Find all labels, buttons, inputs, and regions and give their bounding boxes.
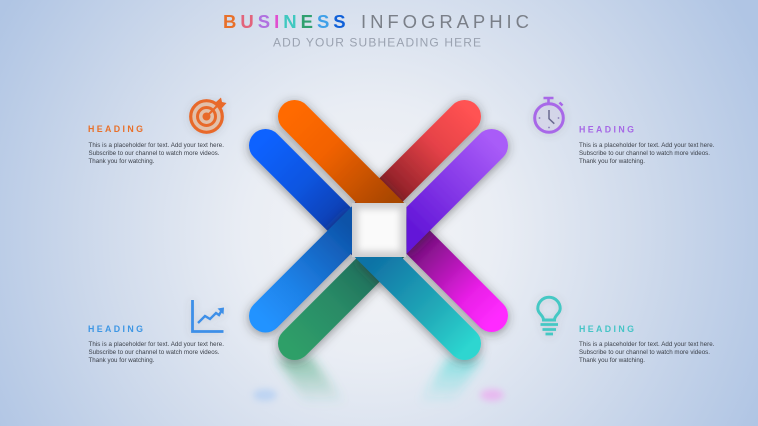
arm: light blue	[249, 206, 352, 333]
body: bottom right	[579, 341, 715, 364]
body: top left: This is a placeholder for text. Add your text here.	[88, 142, 224, 149]
reflection: teal bar	[418, 358, 482, 404]
body: top right: Thank you for watching.	[579, 158, 645, 165]
subtitle: ADD YOUR SUBHEADING HERE	[273, 36, 481, 50]
body: bottom left: Subscribe to our channel to watch more videos.	[88, 349, 220, 356]
arm: magenta	[406, 207, 508, 332]
arm: green	[278, 257, 404, 360]
icon: light bulb	[538, 297, 560, 334]
title	[223, 11, 529, 32]
body: bottom left: This is a placeholder for text. Add your text here.	[88, 341, 224, 348]
heading: top left: HEADING	[88, 124, 143, 134]
body: top right: This is a placeholder for text. Add your text here.	[579, 142, 715, 149]
body: bottom left	[88, 341, 224, 364]
icon: line chart	[192, 300, 224, 332]
heading: bottom right: HEADING	[579, 324, 634, 334]
body: bottom right: Thank you for watching.	[579, 357, 645, 364]
body: top right	[579, 142, 715, 165]
heading: top right: HEADING	[579, 124, 634, 134]
body: bottom left: Thank you for watching.	[88, 357, 155, 364]
text block: bottom left	[88, 324, 224, 364]
body: top left: Subscribe to our channel to watch more videos.	[88, 150, 220, 157]
reflection: green bar	[277, 358, 346, 404]
reflection: blue bar	[253, 389, 277, 401]
text block: bottom right	[579, 324, 715, 364]
arm: teal	[355, 257, 481, 360]
body: bottom right: Subscribe to our channel to watch more videos.	[579, 349, 710, 356]
arm: orange	[278, 100, 404, 203]
icon: target	[191, 98, 226, 132]
body: top right: Subscribe to our channel to watch more videos.	[579, 150, 710, 157]
heading: bottom left: HEADING	[88, 324, 143, 334]
text block: top left	[88, 124, 224, 165]
arm: dark blue	[249, 129, 352, 255]
arm: purple	[406, 129, 508, 254]
arm: red	[355, 100, 481, 203]
body: top left	[88, 142, 224, 165]
title: BUSINESS	[223, 11, 350, 32]
center square	[352, 203, 406, 257]
icon: stopwatch	[535, 98, 563, 132]
title: INFOGRAPHIC	[361, 11, 529, 32]
reflection: magenta bar	[480, 389, 504, 401]
body: top left: Thank you for watching.	[88, 158, 155, 165]
body: bottom right: This is a placeholder for text. Add your text here.	[579, 341, 715, 348]
text block: top right	[579, 124, 715, 165]
